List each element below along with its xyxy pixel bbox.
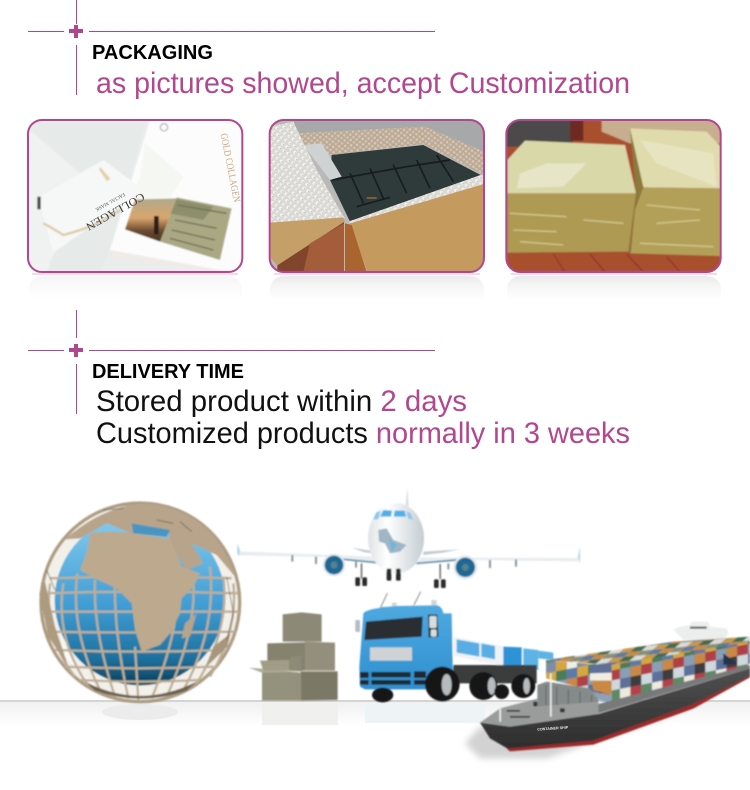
delivery line: stored product: Stored product within 2 days <box>96 385 467 418</box>
photo: facial mask packaging: COLLAGEN <box>84 190 146 232</box>
illustration: container ship: CONTAINER SHIP <box>537 725 569 732</box>
photo: facial mask packaging <box>28 120 242 272</box>
photo: facial mask packaging: FACIAL MASK <box>94 191 125 212</box>
illustration: airplane <box>237 487 580 588</box>
packaging description: as pictures showed, accept Customization <box>96 67 630 100</box>
photo: boxed product in bubble wrap <box>270 120 484 272</box>
section marker: delivery time <box>28 310 435 414</box>
illustration: cardboard globe <box>39 503 240 702</box>
heading: packaging: PACKAGING <box>92 42 213 64</box>
photo reflections <box>29 273 721 300</box>
photo: facial mask packaging: GOLD COLLAGEN <box>218 132 242 203</box>
section marker: packaging <box>28 0 435 95</box>
photo: wrapped cartons on wooden floor <box>506 120 721 272</box>
floor with reflection <box>0 700 750 726</box>
illustration: blue truck <box>355 592 553 702</box>
delivery line: customized products: Customized products normally in 3 weeks <box>96 417 630 450</box>
heading: delivery time: DELIVERY TIME <box>92 361 244 383</box>
illustration: cardboard boxes <box>249 612 338 701</box>
illustration: container ship <box>465 622 750 758</box>
